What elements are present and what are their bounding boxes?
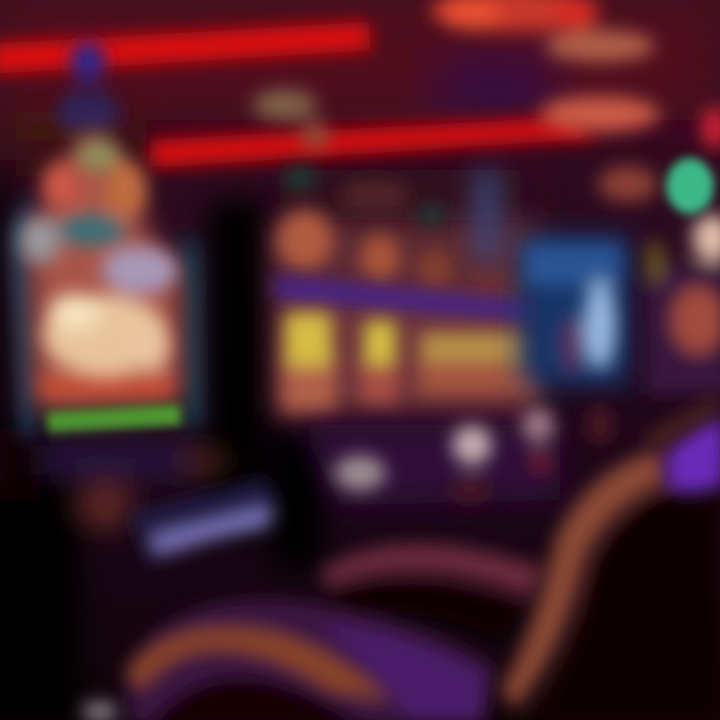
front chair [82, 395, 720, 720]
green strip [46, 404, 182, 434]
blue machine on right [475, 170, 630, 445]
purple band [275, 276, 540, 322]
purple armrest [665, 415, 720, 493]
keyboard deck [130, 478, 280, 565]
top right lights [253, 0, 660, 209]
machine reels [282, 312, 536, 412]
machine lower cabinets [300, 425, 560, 505]
machine frame [10, 42, 202, 440]
left slot machine [10, 42, 280, 565]
machine base [40, 445, 229, 529]
right chair edge [82, 395, 720, 720]
lit buttons [334, 407, 554, 502]
dark pillar and floor shadows [0, 170, 324, 720]
chair arm [500, 448, 720, 720]
machine artwork [28, 125, 182, 410]
middle chair back [320, 543, 545, 640]
ceiling glow [0, 0, 720, 220]
chair back [125, 599, 495, 720]
center slot machines [272, 166, 560, 505]
red ceiling bars [0, 22, 600, 168]
machine toppers [272, 220, 542, 415]
far right machine [645, 106, 720, 395]
